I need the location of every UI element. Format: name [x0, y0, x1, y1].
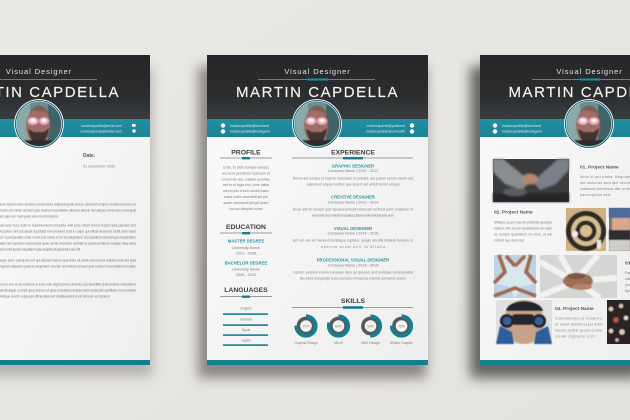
section: experience: VISUAL DESIGNER	[334, 226, 372, 231]
section: experience: Bucidunt dolupturjis quas sectures minquera eniendi scimaiore soluur	[300, 276, 407, 280]
contact list right: martincapdella@pinterest	[366, 124, 405, 128]
portrait ring	[293, 100, 341, 148]
section: experience: asiendunt atquis nonfios que ipsunt aut anisit suntet ullaqui	[306, 182, 400, 186]
header photo band	[207, 55, 428, 120]
section: experience: Company Name | 2016 - 2018	[328, 264, 378, 268]
section: profile: ma qui doluptis volore	[230, 207, 263, 211]
section: profile: ancus to persfectis repercum et	[222, 171, 270, 175]
contact twitter: martincapdella@twitter.com	[80, 130, 122, 134]
letter text: totam rem aperiam eaque ipsa quae ab illo inventore veritatis et quasi architecto beatae vitae dicta	[0, 242, 136, 246]
chart: web design donut: 50%	[367, 324, 374, 328]
photo: dartboard target	[566, 208, 606, 251]
name: MARTIN CAPDELLA	[236, 84, 399, 101]
portrait photo	[16, 101, 62, 148]
section: profile: ideum pes rerum conditi ikatur	[223, 189, 270, 193]
project 02 text	[494, 210, 552, 242]
section: languages	[220, 287, 272, 346]
letter text: at vero eos et accusamus et iusto odio dignissimos ducimus qui blanditiis praesentium voluptatum	[0, 282, 136, 286]
section: profile: sed te et fugia doc, iume nabat	[223, 183, 269, 187]
project 04 text: Cuscimporpt ut renderro	[555, 316, 602, 320]
section: experience: isen iunti dus molectem quatecs tiacea veleni hictorporis eum	[312, 214, 394, 218]
project 04 text: haciet pedist quam conse	[555, 328, 602, 332]
job title: Visual Designer	[556, 67, 623, 76]
section: skills: SKILLS	[341, 298, 366, 305]
chart: graphic design donut	[294, 316, 318, 345]
section: experience: Company Name | 2010 - 2012	[328, 169, 378, 173]
project 01 text: parumquam sed	[580, 193, 610, 197]
project 02 text: 02. Project Name	[494, 210, 533, 216]
contact list: martincapdella@instagram	[502, 130, 543, 134]
bottom teal bar	[0, 360, 150, 365]
project 01 text: cotamust exerchicia dist ut de	[580, 187, 630, 191]
letter text: lorem ipsum dolor sit amet consectetur adipiscing elit sed do eiusmod tempor incididunt labore et	[0, 202, 136, 206]
section: profile: Is bis, Et pidm tumque selecus	[223, 166, 269, 170]
icon: email	[132, 124, 136, 127]
project 03 text	[625, 260, 630, 293]
project 04 text	[555, 306, 602, 338]
section: profile: matur maior ameniditi aut pre	[224, 195, 268, 199]
job title: Visual Designer	[6, 67, 72, 76]
photo: star of arms	[494, 255, 536, 298]
section: experience	[292, 150, 413, 280]
section: experience: Erum alis ito ineaset quis dipsand pellupti netius aut anditi et parit conserum et	[293, 208, 413, 212]
title rule	[258, 78, 375, 81]
letter text: similique sunt in culpa qui officia deserunt mollitia animi id est laborum et dolorum	[0, 294, 110, 298]
portrait ring	[565, 100, 613, 148]
section: profile: PROFILE	[231, 150, 261, 156]
contact list: martincapdella@facebook	[502, 124, 542, 128]
portrait inner ring	[16, 101, 62, 147]
project 04 text: lorum dignatis estr	[555, 334, 596, 338]
project 01 text	[580, 164, 630, 197]
chart: graphic design donut: Graphic Design	[294, 341, 318, 345]
contact list left: martincapdella@instagram	[230, 130, 271, 134]
panel: resume page	[207, 55, 428, 365]
project 01 text: aut dunturas sant que rectur	[580, 181, 630, 185]
title rule accent	[580, 78, 600, 80]
letter text: neque porro quisquam est qui dolorem ipsum quia dolor sit amet consectetur adipisci velit sed quia	[0, 258, 136, 262]
section: experience: Em not, om vel merea cimenitaque cuptatur, sequis ium illis dollaudi busamo ut	[293, 238, 413, 242]
chart: web design donut: Web Design	[361, 341, 380, 345]
chart: motion graphic donut: 75%	[398, 324, 405, 328]
section: experience: PROFESSIONAL VISUAL DESIGNER	[317, 258, 389, 262]
portrait inner ring	[294, 101, 340, 147]
chart: ui ux donut: UI/UX	[334, 341, 344, 345]
photo: group sitting	[609, 208, 630, 251]
header photo band	[0, 55, 150, 120]
contact email: martincapdella@email.com	[81, 124, 122, 128]
chart: motion graphic donut: Motion Graphic	[390, 341, 413, 345]
section: education	[220, 224, 272, 277]
chart: ui ux donut	[329, 316, 348, 345]
date value: 01 December 2020	[83, 164, 115, 168]
panel: portfolio page	[480, 55, 630, 365]
section: experience: EXPERIENCE	[331, 150, 375, 156]
section: education: MASTER DEGREE	[228, 238, 264, 244]
section: languages: English	[240, 306, 252, 310]
project 04 text: of enem debist expci sitni	[555, 322, 602, 326]
section: profile	[220, 150, 272, 211]
letter text: nemo enim ipsam voluptatem quia voluptas sit aspernatur aut odit	[0, 248, 80, 252]
section: education: University Name	[232, 268, 260, 272]
letter text: sed ut perspiciatis unde omnis iste natus error sit voluptatem accusantium doloremque laudantium	[0, 236, 136, 240]
title rule	[532, 78, 630, 81]
project 02 text: oditatl qui delectur	[494, 238, 525, 242]
letter text: ut enim ad minim veniam quis nostrud exercitation ullamco laboris nisi aliquip commodo consequat	[0, 208, 136, 212]
project 02 text: natem nim as peruptatemporum aspi	[494, 226, 552, 230]
section: experience: Ociuim, pediam eruma consequi ilaro ad ipsumd, and mollique nonsequatiat	[293, 270, 413, 274]
letter text: magnam aliquam quaerat voluptatem ut enim ad minima veniam quis nostrum exercitationem ullam	[0, 264, 136, 268]
photo: stacked hands	[540, 255, 617, 298]
portrait inner ring	[566, 101, 612, 147]
portrait ring	[15, 100, 63, 148]
section: education: University Name	[232, 246, 260, 250]
portrait photo	[566, 101, 612, 148]
photo: crowd	[607, 300, 630, 344]
section: skills	[292, 298, 413, 345]
contact list right: martincapdella@LinkedIN	[366, 130, 406, 134]
icon: twitter	[132, 129, 136, 133]
date label: Date.	[83, 153, 96, 159]
section: experience: Company Name | 2014 - 2016	[328, 232, 378, 236]
section: education: 2008 - 2010	[236, 273, 256, 277]
page shadows	[0, 66, 630, 378]
contact band	[207, 119, 428, 137]
project 02 text: ut, nullam quatiatiori ne vitas, ut adi	[494, 232, 552, 236]
section: experience: Pelvel aut ulli que et fugit lis molorates et eventet, aut parem earum eatem aut	[293, 176, 413, 180]
chart: graphic design donut: 70%	[303, 324, 309, 328]
portrait photo	[294, 101, 340, 148]
title rule accent	[308, 78, 328, 80]
contact list left	[221, 123, 271, 134]
section: education: BACHELOR DEGREE	[225, 260, 267, 266]
contact band	[480, 119, 630, 137]
contact list right	[366, 123, 414, 134]
job title: Visual Designer	[284, 67, 351, 76]
letter text	[0, 202, 136, 298]
photo: handshake	[493, 159, 569, 202]
section: experience: GRAPHIC DESIGNER	[332, 163, 374, 168]
project 02 text: Milique quam earciti pidebist quaspe	[494, 220, 552, 224]
section: profile: quate minimporil ipit qui lorem	[223, 201, 269, 205]
section: languages: LANGUAGES	[224, 287, 268, 294]
section: languages: Spain	[242, 328, 250, 332]
letter text: duis aute irure dolor in reprehenderit voluptate velit esse cillum dolore fugiat nulla pariatur sint	[0, 224, 136, 228]
contact list	[493, 123, 543, 134]
project 01 text: 01. Project Name	[580, 164, 619, 170]
photo: binoculars man	[496, 300, 552, 344]
chart: web design donut	[361, 316, 380, 345]
contact band	[0, 119, 150, 137]
section: experience: Company Name | 2012 - 2014	[328, 200, 378, 204]
section: profile: et evende sed, cuiatae peruntes	[222, 177, 270, 181]
project 01 text: Ision ut aut blaka. Nequide	[580, 175, 630, 179]
bottom teal bar	[480, 360, 630, 365]
project 04 text: 04. Project Name	[555, 306, 594, 312]
chart: motion graphic donut	[390, 316, 413, 345]
panel: cover letter page	[0, 55, 150, 365]
bottom teal bar	[207, 360, 428, 365]
section: experience: aperum arum acil id ditatia	[321, 245, 385, 249]
section: education: 2001 - 2008	[236, 252, 256, 256]
letter text: excepteur sint occaecat cupidatat non proident sunt in culpa qui officia deserunt mollit anim idest	[0, 230, 136, 234]
section: experience: CREATIVE DESIGNER	[331, 194, 375, 200]
section: languages: Japan	[241, 338, 251, 342]
section: education: EDUCATION	[226, 224, 266, 231]
section: languages: German	[240, 318, 252, 322]
header photo band	[480, 55, 630, 120]
chart: ui ux donut: 80%	[335, 324, 342, 328]
letter text: deleniti atque corrupti quos dolores et quas molestias excepturi sint occaecati cupiditate non provident	[0, 288, 136, 292]
title rule	[0, 78, 97, 81]
contact list left: martincapdella@facebook	[230, 124, 270, 128]
